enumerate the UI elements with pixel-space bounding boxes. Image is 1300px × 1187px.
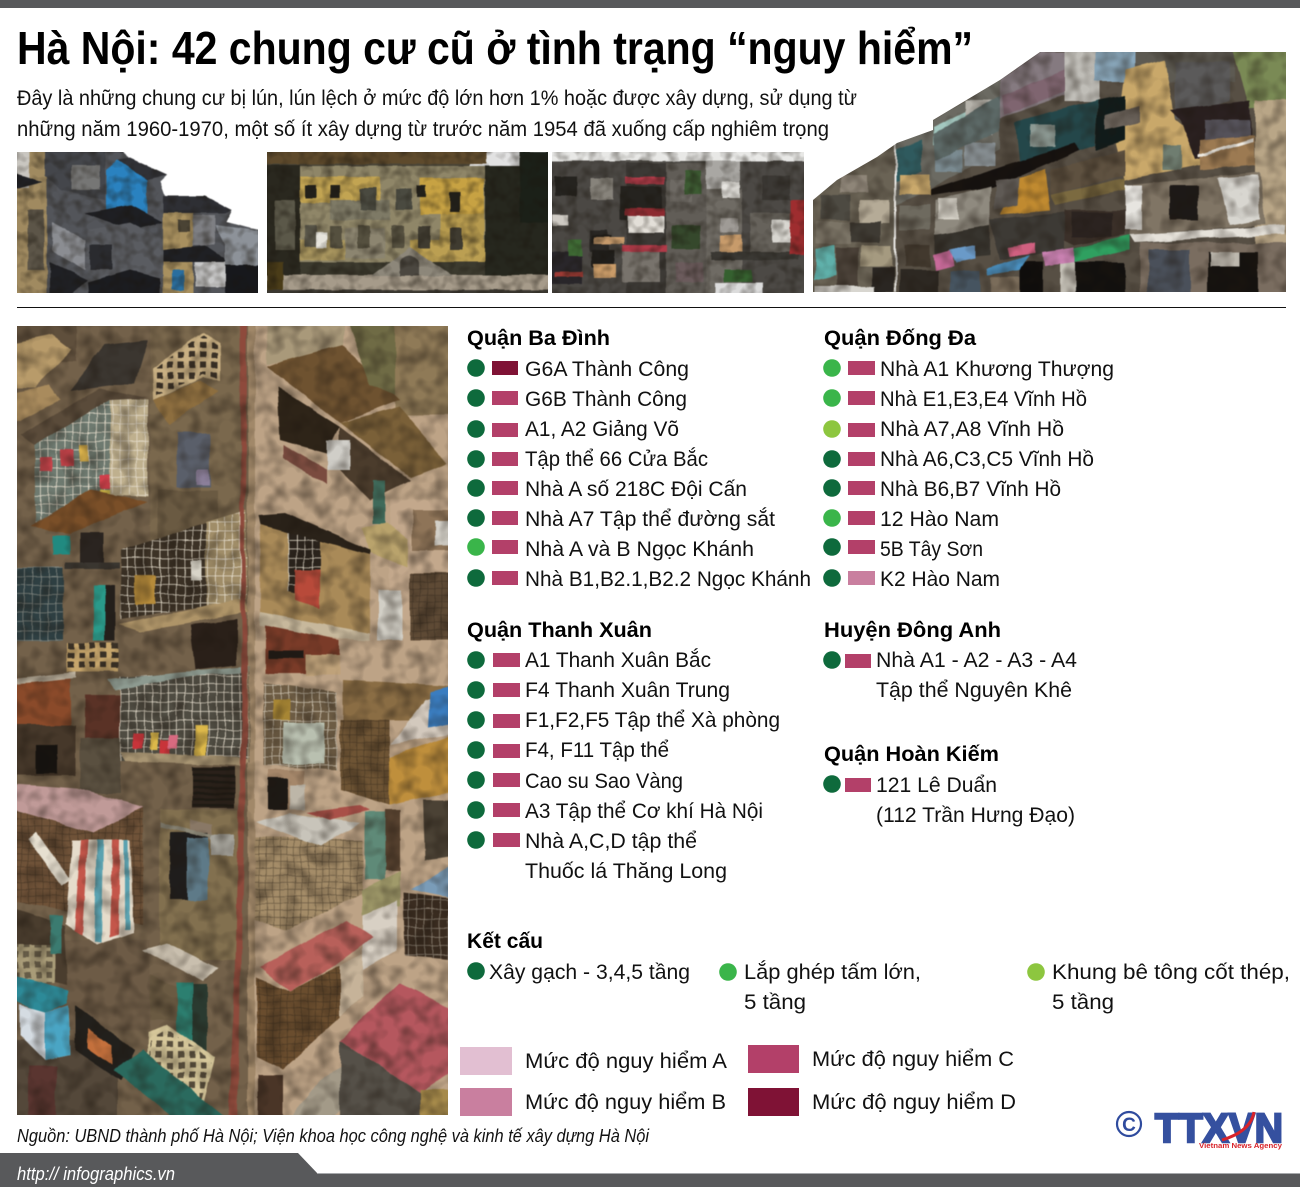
structure: large panel: Lắp ghép tấm lớn, (744, 961, 921, 984)
level C (748, 1045, 1014, 1073)
subtitle: Đây là những chung cư bị lún, lún lệch ở mức độ lớn hơn 1% hoặc được xây dựng, sử dụng từ (17, 87, 857, 110)
structure: reinforced concrete: 5 tầng (1052, 991, 1114, 1014)
heading: Huyện Đông Anh: Huyện Đông Anh (824, 619, 1001, 642)
item: Nhà A1 - A2 - A3 - A4 Tập thể Nguyên Khê: Tập thể Nguyên Khê (876, 679, 1072, 702)
district list: Quận Ba Đình (467, 327, 811, 591)
photo: large building with caged balconies (5, 314, 460, 1129)
title: Hà Nội: 42 chung cư cũ ở tình trạng “nguy hiểm” (17, 22, 973, 74)
item: 121 Lê Duẩn (112 Trần Hưng Đạo): 121 Lê Duẩn (876, 774, 997, 797)
item: A1 Thanh Xuân Bắc: A1 Thanh Xuân Bắc (525, 649, 711, 672)
item: Nhà A6,C3,C5 Vĩnh Hồ: Nhà A6,C3,C5 Vĩnh Hồ (880, 448, 1094, 471)
level A: Mức độ nguy hiểm A (525, 1050, 727, 1073)
photo: grey apartment block (552, 152, 804, 293)
item: Nhà A,C,D tập thể Thuốc lá Thăng Long (467, 830, 727, 883)
item: G6A Thành Công: G6A Thành Công (525, 358, 689, 381)
photo: long apartment block with shops (813, 52, 1286, 292)
structure: brick: Xây gạch - 3,4,5 tầng (489, 961, 690, 984)
item: Nhà A,C,D tập thể Thuốc lá Thăng Long: Thuốc lá Thăng Long (525, 860, 727, 883)
item: Nhà A và B Ngọc Khánh: Nhà A và B Ngọc Khánh (525, 538, 754, 561)
item: A1, A2 Giảng Võ: A1, A2 Giảng Võ (525, 418, 679, 441)
item: A3 Tập thể Cơ khí Hà Nội: A3 Tập thể Cơ khí Hà Nội (525, 800, 763, 823)
structure: large panel (719, 961, 921, 1014)
heading: Quận Đống Đa: Quận Đống Đa (824, 327, 976, 350)
level A (460, 1047, 727, 1075)
item: 12 Hào Nam: 12 Hào Nam (880, 508, 999, 531)
photo: building with blue balcony (17, 152, 258, 293)
item: 12 Hào Nam (823, 508, 999, 531)
district list: Quận Thanh Xuân (467, 619, 780, 883)
item: Nhà A7 Tập thể đường sắt: Nhà A7 Tập thể đường sắt (525, 508, 775, 531)
structure: reinforced concrete: Khung bê tông cốt thép, (1052, 961, 1290, 984)
item: G6B Thành Công: G6B Thành Công (525, 388, 687, 411)
district list: Huyện Đông Anh (823, 619, 1077, 702)
item: Nhà E1,E3,E4 Vĩnh Hồ: Nhà E1,E3,E4 Vĩnh Hồ (880, 388, 1087, 411)
item: 121 Lê Duẩn (112 Trần Hưng Đạo): (112 Trần Hưng Đạo) (876, 804, 1075, 827)
item: Nhà A số 218C Đội Cấn: Nhà A số 218C Đội Cấn (525, 478, 747, 501)
level B: Mức độ nguy hiểm B (525, 1091, 726, 1114)
footer bar with URL tab (0, 1153, 1300, 1187)
item: Nhà A1 - A2 - A3 - A4 Tập thể Nguyên Khê (823, 649, 1077, 702)
item: Nhà A1 Khương Thượng: Nhà A1 Khương Thượng (880, 358, 1114, 381)
item: Nhà A,C,D tập thể Thuốc lá Thăng Long: Nhà A,C,D tập thể (525, 830, 697, 853)
item: K2 Hào Nam: K2 Hào Nam (880, 568, 1000, 591)
structure: reinforced concrete (1027, 961, 1290, 1014)
item: Tập thể 66 Cửa Bắc: Tập thể 66 Cửa Bắc (525, 448, 708, 471)
item: Nhà A1 - A2 - A3 - A4 Tập thể Nguyên Khê: Nhà A1 - A2 - A3 - A4 (876, 649, 1077, 672)
item: 121 Lê Duẩn (112 Trần Hưng Đạo) (823, 774, 1075, 827)
heading: Quận Thanh Xuân: Quận Thanh Xuân (467, 619, 652, 642)
heading: Quận Ba Đình: Quận Ba Đình (467, 327, 610, 350)
photo: yellow colonial building (267, 152, 548, 293)
item: F1,F2,F5 Tập thể Xà phòng: F1,F2,F5 Tập thể Xà phòng (525, 709, 780, 732)
legend: structure types (467, 930, 1290, 1014)
level D (748, 1088, 1016, 1116)
item: Nhà B6,B7 Vĩnh Hồ: Nhà B6,B7 Vĩnh Hồ (880, 478, 1061, 501)
level C: Mức độ nguy hiểm C (812, 1048, 1014, 1071)
item: F4 Thanh Xuân Trung: F4 Thanh Xuân Trung (525, 679, 730, 702)
item: Nhà B1,B2.1,B2.2 Ngọc Khánh: Nhà B1,B2.1,B2.2 Ngọc Khánh (525, 568, 811, 591)
item: Cao su Sao Vàng: Cao su Sao Vàng (525, 770, 683, 793)
divider (17, 307, 1286, 308)
subtitle (17, 87, 857, 141)
district list: Quận Hoàn Kiếm (823, 743, 1075, 827)
logo: TTXVN: TTXVN (1155, 1105, 1283, 1151)
level B (460, 1088, 726, 1116)
logo: TTXVN: C (1122, 1115, 1136, 1136)
legend: danger levels (460, 1045, 1016, 1116)
structure: large panel: 5 tầng (744, 991, 806, 1014)
subtitle: những năm 1960-1970, một số ít xây dựng từ trước năm 1954 đã xuống cấp nghiêm trọng (17, 118, 829, 141)
footer bar with URL tab: http:// infographics.vn (17, 1164, 175, 1184)
item: 5B Tây Sơn (823, 538, 983, 561)
heading: Quận Hoàn Kiếm: Quận Hoàn Kiếm (824, 743, 999, 766)
level D: Mức độ nguy hiểm D (812, 1091, 1016, 1114)
heading: Kết cấu: Kết cấu (467, 930, 543, 953)
item: 5B Tây Sơn: 5B Tây Sơn (880, 538, 983, 561)
district list: Quận Đống Đa (823, 327, 1114, 591)
item: K2 Hào Nam (823, 568, 1000, 591)
item: Nhà A7,A8 Vĩnh Hồ: Nhà A7,A8 Vĩnh Hồ (880, 418, 1064, 441)
item: F4, F11 Tập thể: F4, F11 Tập thể (525, 739, 669, 762)
source note: Nguồn: UBND thành phố Hà Nội; Viện khoa học công nghệ và kinh tế xây dựng Hà Nội (17, 1126, 650, 1146)
logo: TTXVN: Vietnam News Agency (1199, 1141, 1283, 1150)
top bar (0, 0, 1300, 8)
